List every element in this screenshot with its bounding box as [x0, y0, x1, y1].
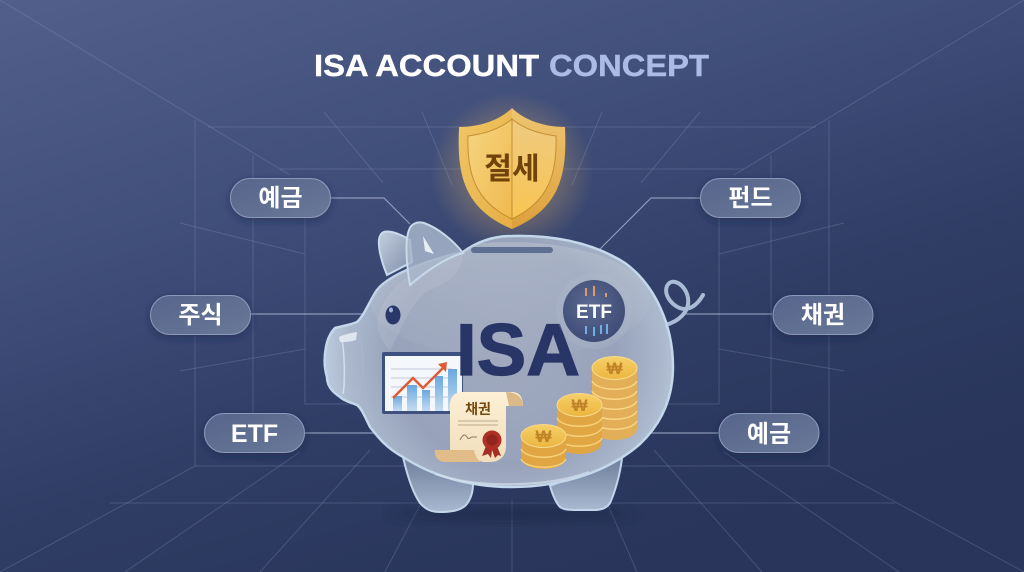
pill: ETF [204, 414, 304, 452]
coin stack: small [521, 424, 566, 469]
ETF badge: ETF [576, 302, 612, 323]
bottom highlight [435, 472, 589, 484]
coin stack: middle: ₩ [571, 396, 588, 415]
chart card [382, 352, 463, 414]
left leg [403, 457, 473, 512]
head highlight [371, 242, 624, 350]
pill: 주식 [150, 295, 250, 334]
pill: 예금 left: 예금 [258, 178, 303, 213]
coin stack: tall: ₩ [606, 359, 623, 378]
pill: 채권 [773, 295, 873, 334]
tail [665, 282, 703, 325]
snout [341, 336, 344, 394]
title: CONCEPT [549, 48, 709, 83]
front ear [406, 222, 463, 285]
coin stack: small: ₩ [535, 427, 552, 446]
right leg [550, 458, 622, 510]
ETF badge [556, 273, 632, 349]
pill: 채권: 채권 [801, 295, 845, 330]
shield: 절세 [430, 92, 594, 252]
pill: ETF: ETF [231, 420, 278, 448]
bond scroll: 채권 [465, 399, 491, 419]
coin stack: tall [592, 356, 637, 440]
body [325, 236, 673, 487]
ISA label: ISA [456, 310, 580, 391]
back ear [379, 231, 412, 275]
title [314, 48, 709, 83]
eye [386, 306, 400, 324]
coin stack: middle [557, 394, 602, 454]
connector lines [251, 198, 772, 433]
pill: 펀드: 펀드 [728, 178, 773, 213]
title: ISA ACCOUNT [314, 48, 539, 83]
pill: 펀드 [700, 178, 800, 218]
pill: 예금 left [230, 178, 330, 218]
pill: 예금 right [719, 414, 819, 452]
shield: 절세: 절세 [484, 144, 540, 188]
piggy bank [325, 222, 703, 522]
floor shadow [392, 506, 632, 522]
bond scroll [435, 392, 523, 462]
pill: 주식: 주식 [178, 295, 223, 330]
pill: 예금 right: 예금 [747, 414, 791, 449]
coin slot [471, 247, 553, 253]
